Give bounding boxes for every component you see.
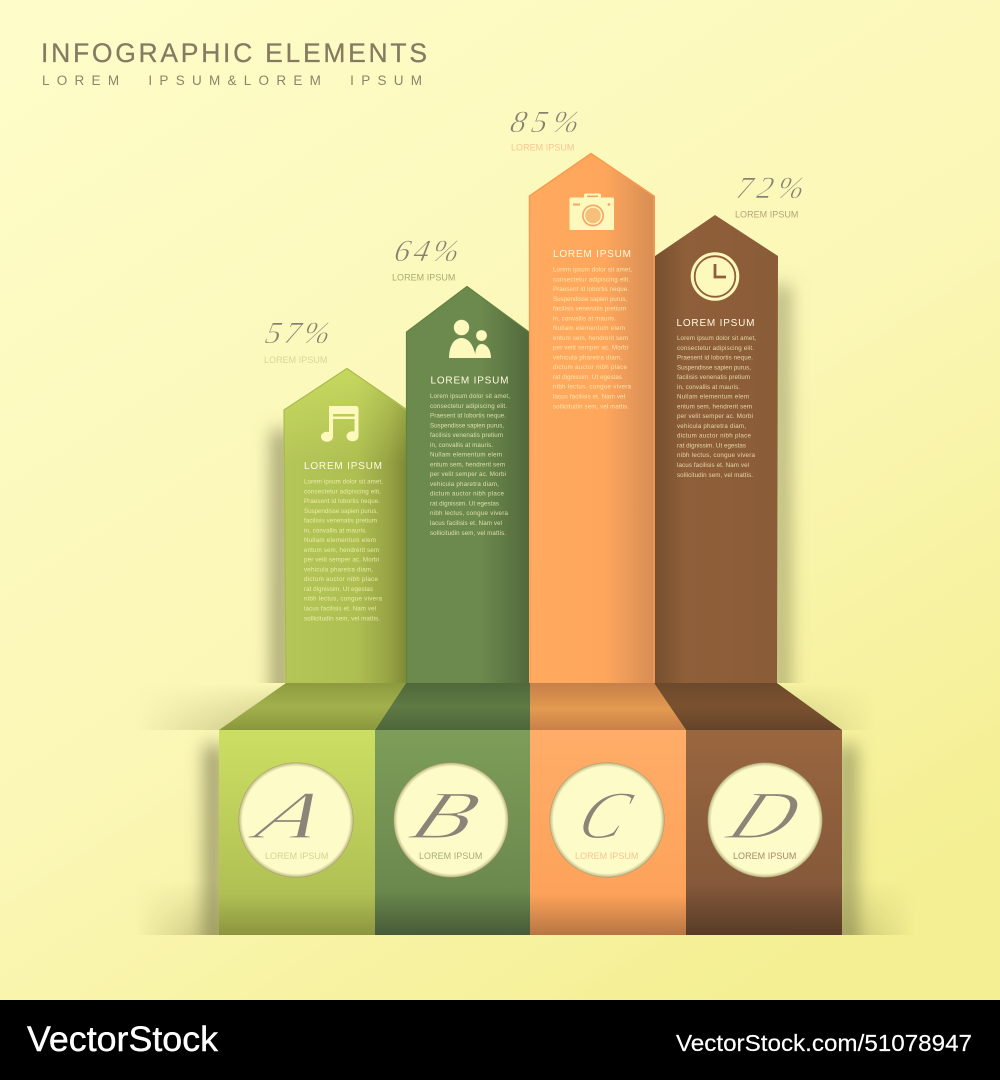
body text C: in, convallis at mauris. — [553, 315, 616, 322]
body text D: lacus facilisis et. Nam vel — [677, 462, 749, 469]
body text A: in, convallis at mauris. — [304, 527, 367, 534]
body text C: vehicula pharetra diam, — [553, 354, 622, 361]
body text C: entum sem, hendrerit sem — [553, 335, 628, 342]
body text B: Suspendisse sapien purus, — [430, 422, 504, 429]
label 64%: 64% — [392, 233, 463, 268]
circle D — [708, 762, 822, 878]
body text A: vehicula pharetra diam, — [304, 566, 373, 573]
body text A: facilisis venenatis pretium — [304, 518, 377, 525]
body text B: per velit semper ac. Morbi — [430, 471, 506, 478]
circle A — [238, 762, 354, 878]
footer bar — [0, 1000, 1000, 1080]
body text B: Nullam elementum elem — [430, 452, 502, 459]
circle caption A: LOREM IPSUM — [265, 851, 329, 861]
body text D: rat dignissim. Ut egestas — [677, 442, 746, 450]
label 85%: 85% — [508, 104, 583, 139]
body text B: dictum auctor nibh place — [430, 491, 505, 498]
body text D: facilisis venenatis pretium — [677, 374, 750, 381]
letter A: A — [239, 778, 339, 853]
body text A: rat dignissim. Ut egestas — [304, 586, 373, 593]
body text D: in, convallis at mauris. — [677, 384, 740, 391]
body text D: vehicula pharetra diam, — [677, 423, 746, 430]
body text C: lacus facilisis et. Nam vel — [553, 394, 625, 400]
body text A: Suspendisse sapien purus, — [304, 508, 378, 515]
body text B: Lorem ipsum dolor sit amet, — [430, 393, 510, 400]
letter D: D — [716, 779, 813, 853]
circle caption D: LOREM IPSUM — [733, 851, 797, 861]
body text B: entum sem, hendrerit sem — [430, 461, 505, 468]
caption 64%: LOREM IPSUM — [392, 272, 456, 282]
body text C: rat dignissim. Ut egestas — [553, 374, 622, 381]
front panel D — [686, 730, 842, 935]
body text C: per velit semper ac. Morbi — [553, 345, 628, 352]
icon: music note — [321, 406, 359, 442]
body text A: sollicitudin sem, vel mattis. — [304, 615, 380, 622]
body text B: consectetur adipiscing elit. — [430, 403, 507, 410]
body text A: consectetur adipiscing elit. — [304, 488, 381, 495]
front panel A — [219, 730, 375, 935]
body text C: consectetur adipiscing elit. — [553, 276, 630, 283]
body text D: consectetur adipiscing elit. — [677, 345, 754, 352]
body text A — [304, 478, 383, 622]
icon: clock — [691, 252, 739, 301]
front panel C — [530, 730, 686, 935]
body text C: dictum auctor nibh place — [553, 364, 628, 371]
heading B: LOREM IPSUM — [430, 376, 508, 386]
icon: people — [449, 320, 491, 358]
body text C: nibh lectus, congue vivera — [553, 384, 632, 391]
body text D: Lorem ipsum dolor sit amet, — [677, 335, 756, 342]
bar B — [406, 286, 529, 683]
body text A: Lorem ipsum dolor sit amet, — [304, 478, 383, 486]
caption 85%: LOREM IPSUM — [511, 142, 575, 152]
body text D: sollicitudin sem, vel mattis. — [677, 472, 753, 479]
heading A: LOREM IPSUM — [304, 461, 382, 472]
percentage labels — [263, 104, 808, 365]
body text D: Praesent id lobortis neque. — [677, 354, 753, 362]
circle caption C: LOREM IPSUM — [575, 851, 639, 861]
footer url: VectorStock.com/51078947 — [676, 1030, 972, 1056]
letter B: B — [399, 778, 492, 853]
body text C: facilisis venenatis pretium — [553, 306, 626, 313]
body text D: Suspendisse sapien purus, — [677, 364, 751, 371]
body text B: lacus facilisis et. Nam vel — [430, 520, 502, 527]
icon: camera — [570, 194, 614, 230]
body text A: dictum auctor nibh place — [304, 576, 379, 583]
front panel B — [375, 730, 530, 935]
body text C: Praesent id lobortis neque. — [553, 286, 629, 293]
circle B — [394, 762, 508, 878]
body text B: vehicula pharetra diam, — [430, 481, 499, 488]
body text D: Nullam elementum elem — [677, 394, 749, 401]
body text B: nibh lectus, congue vivera — [430, 510, 509, 517]
body text D: per velit semper ac. Morbi — [677, 413, 753, 420]
fold band — [219, 683, 842, 730]
body text C: Nullam elementum elem — [553, 325, 625, 332]
label 72%: 72% — [734, 170, 808, 205]
body text C — [553, 266, 632, 410]
body text A: lacus facilisis et. Nam vel — [304, 606, 376, 612]
heading D: LOREM IPSUM — [676, 318, 754, 329]
body text D: dictum auctor nibh place — [677, 433, 752, 440]
body text B — [430, 393, 510, 537]
letter C: C — [568, 778, 642, 853]
body text A: entum sem, hendrerit sem — [304, 547, 379, 554]
body text B: facilisis venenatis pretium — [430, 432, 503, 439]
body text C: Suspendisse sapien purus, — [553, 296, 627, 303]
caption 57%: LOREM IPSUM — [264, 355, 328, 365]
body text D — [677, 335, 756, 479]
body text A: Praesent id lobortis neque. — [304, 498, 380, 505]
label 57%: 57% — [263, 315, 334, 350]
circle caption B: LOREM IPSUM — [419, 851, 483, 861]
bar D — [655, 215, 778, 683]
body text B: sollicitudin sem, vel mattis. — [430, 530, 506, 537]
body text A: nibh lectus, congue vivera — [304, 596, 383, 603]
body text B: rat dignissim. Ut egestas — [430, 500, 499, 508]
bar A — [284, 368, 406, 683]
body text B: in, convallis at mauris. — [430, 442, 493, 449]
body text D: entum sem, hendrerit sem — [677, 403, 752, 410]
body text C: sollicitudin sem, vel mattis. — [553, 403, 629, 410]
body text A: per velit semper ac. Morbi — [304, 557, 379, 564]
caption 72%: LOREM IPSUM — [735, 210, 799, 220]
body text B: Praesent id lobortis neque. — [430, 412, 506, 420]
footer logo: VectorStock — [27, 1020, 219, 1059]
shadows behind the chart — [135, 285, 915, 955]
circle C — [550, 762, 664, 878]
heading C: LOREM IPSUM — [553, 249, 631, 260]
body text A: Nullam elementum elem — [304, 537, 376, 544]
body text C: Lorem ipsum dolor sit amet, — [553, 266, 632, 274]
body text D: nibh lectus, congue vivera — [677, 452, 756, 459]
subtitle: LOREM IPSUM&LOREM IPSUM — [42, 73, 422, 88]
bar C — [529, 153, 655, 683]
title: INFOGRAPHIC ELEMENTS — [41, 38, 427, 68]
